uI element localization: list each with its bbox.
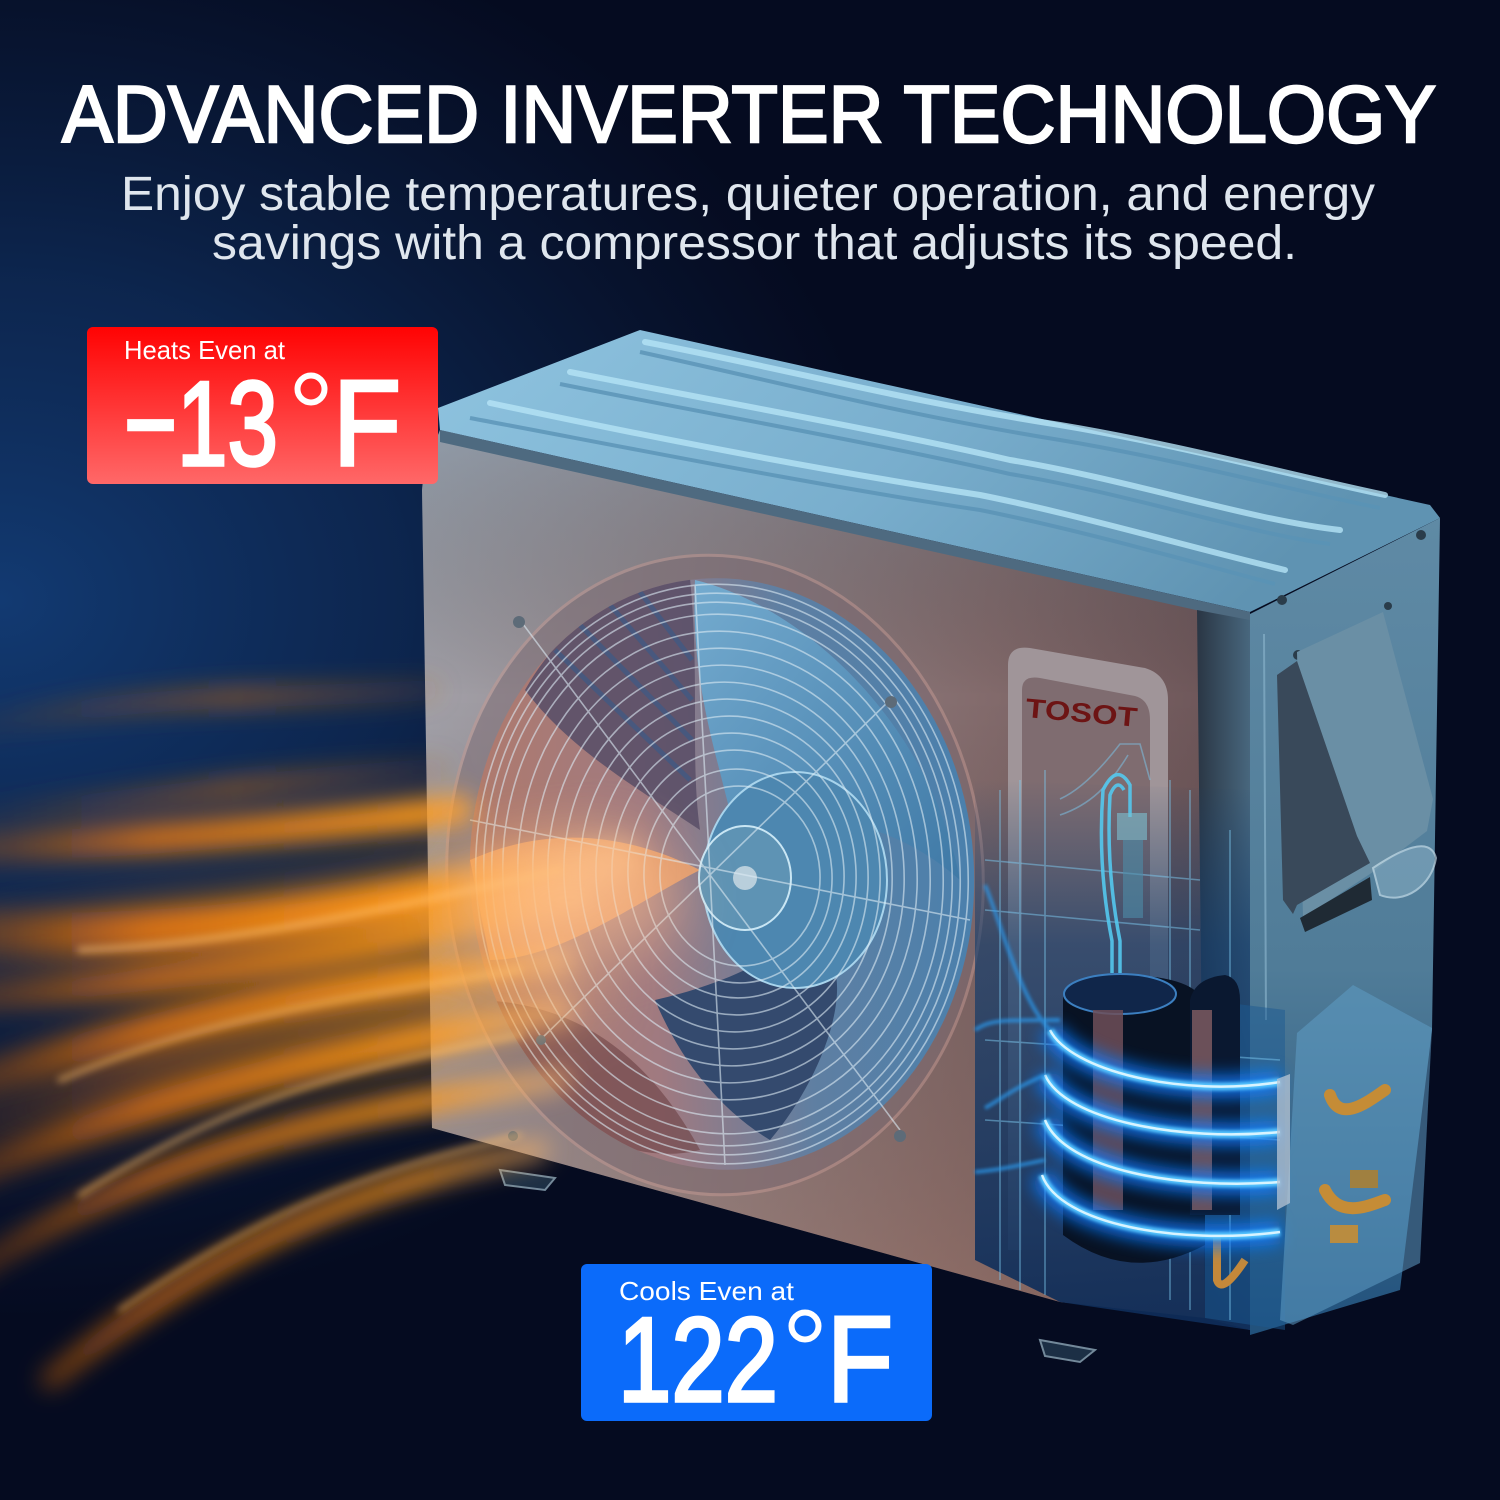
feet (500, 1170, 1095, 1362)
corner and side panel (1197, 518, 1440, 1335)
callout: heats even at -13F (87, 327, 438, 491)
subtitle (121, 168, 1375, 270)
pipes (1101, 775, 1130, 973)
brand plate (1008, 648, 1168, 1250)
compressor (1063, 974, 1240, 1263)
callout: heats even at -13F: Heats Even at (124, 335, 286, 365)
callout: heats even at -13F: −13 (124, 357, 278, 491)
warm air streaks (0, 690, 680, 1380)
fan guard (446, 554, 985, 1196)
brand plate: TOSOT (1024, 693, 1139, 733)
title: ADVANCED INVERTER TECHNOLOGY (62, 70, 1436, 160)
subtitle: Enjoy stable temperatures, quieter operation, and energy (121, 168, 1375, 221)
guard rings (456, 568, 988, 1180)
callout: cools even at 122F: 122 (618, 1293, 778, 1427)
callout: cools even at 122F: Cools Even at (619, 1276, 795, 1306)
subtitle: savings with a compressor that adjusts its speed. (212, 217, 1297, 270)
internals (975, 744, 1285, 1330)
top panel of unit (438, 330, 1440, 622)
front panel (422, 430, 1250, 1318)
blue coil glow (975, 885, 1280, 1236)
screws (508, 616, 906, 1142)
callout: cools even at 122F (581, 1264, 932, 1427)
brass tube (1217, 1235, 1245, 1284)
transparent valve box (1277, 985, 1432, 1325)
side handle cover (1277, 612, 1436, 932)
outdoor unit (422, 330, 1440, 1362)
callout: cools even at 122F: F (827, 1291, 893, 1427)
callout: heats even at -13F: F (333, 355, 401, 491)
fan blades (470, 578, 960, 1154)
